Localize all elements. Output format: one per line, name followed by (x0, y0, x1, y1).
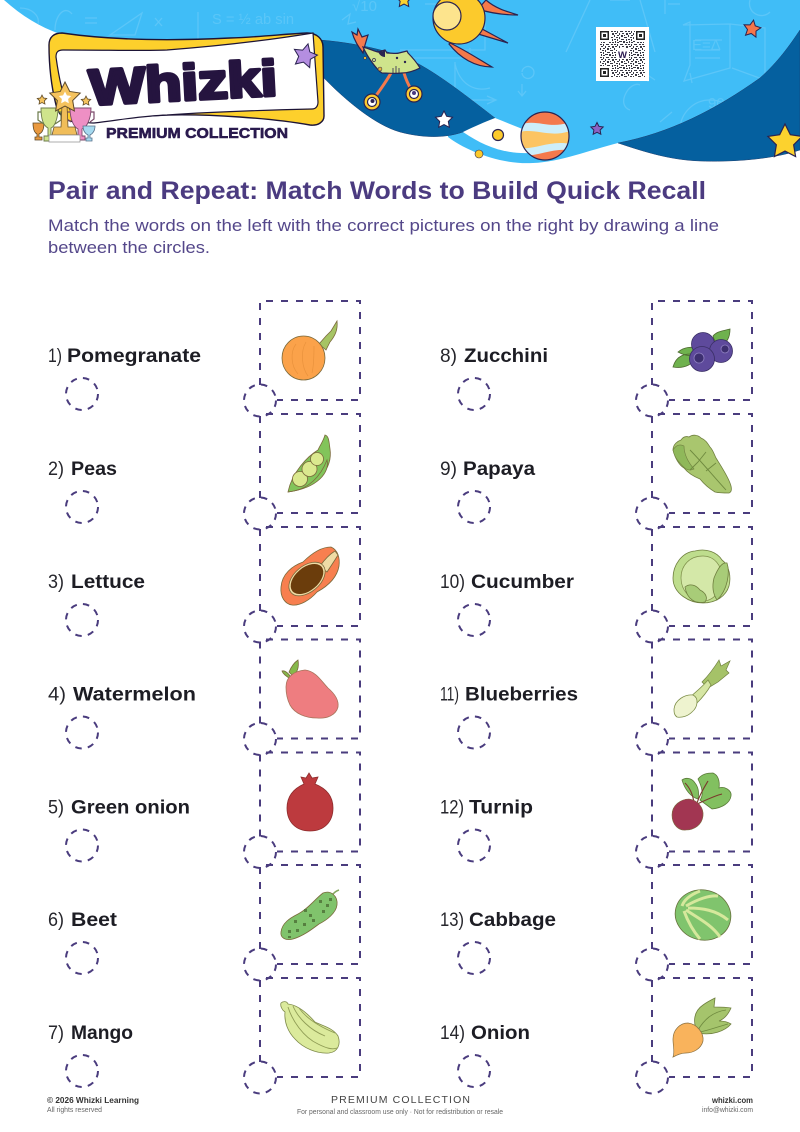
icon: beet (672, 773, 731, 830)
icon: cucumber (281, 890, 339, 940)
item 3: Lettuce with papaya picture (48, 527, 360, 642)
item 8: Zucchini with blueberries picture (440, 301, 752, 416)
icon: onion (282, 321, 337, 380)
label: 8) (440, 346, 457, 367)
label: Lettuce (71, 572, 145, 593)
item 13: Cabbage with watermelon picture (440, 865, 752, 980)
white wedge (463, 118, 530, 153)
item 9: Papaya with lettuce picture (440, 414, 752, 530)
label: 10) (440, 572, 465, 593)
title: Pair and Repeat: Match Words to Build Quick Recall (48, 177, 706, 205)
yellow badge (49, 33, 324, 125)
label: Papaya (463, 459, 535, 480)
label: 1) (48, 346, 62, 367)
item 6: Beet with cucumber picture (48, 865, 360, 980)
label: 7) (48, 1023, 64, 1044)
label (48, 459, 117, 480)
faint math doodles: E=Δ (692, 37, 721, 54)
tagline: PREMIUM COLLECTION (106, 125, 288, 142)
item 7: Mango with zucchini picture (48, 978, 360, 1094)
white plate (56, 33, 318, 123)
icon: papaya (281, 547, 339, 605)
item 12: Turnip with beet picture (440, 752, 752, 868)
label: 14) (440, 1023, 465, 1044)
faint math doodles (20, 0, 783, 160)
icon: green onion (674, 660, 730, 717)
label: 4) (48, 684, 66, 706)
label: Zucchini (464, 346, 548, 367)
footer right: info@whizki.com (702, 1107, 753, 1114)
label: Pomegranate (67, 346, 201, 367)
label (440, 798, 533, 818)
logo (33, 33, 324, 142)
faint math doodles: √2 (766, 99, 783, 116)
label: 11) (440, 684, 459, 706)
dark blue wave left (320, 40, 495, 137)
instructions: between the circles. (48, 238, 210, 257)
faint math doodles: 90 (708, 95, 725, 112)
footer left: © 2026 Whizki Learning (47, 1096, 139, 1105)
label: Beet (71, 910, 118, 931)
item 5: Green onion with pomegranate picture (48, 752, 360, 868)
label: Green onion (71, 798, 190, 818)
QR code: W (618, 50, 628, 60)
item 4: Watermelon with mango picture (48, 640, 360, 755)
footer center: PREMIUM COLLECTION (331, 1094, 470, 1106)
icon: mango (282, 660, 338, 718)
decorative stars and balls (396, 0, 800, 158)
sky blue wave (4, 0, 800, 163)
green alien creature (352, 29, 422, 110)
label: 6) (48, 910, 64, 931)
footer right (702, 1096, 753, 1114)
label: Blueberries (465, 684, 578, 706)
item 14: Onion with turnip picture (440, 978, 752, 1094)
purple star (291, 41, 320, 69)
label (440, 910, 556, 931)
label: Peas (71, 459, 117, 480)
trophies (33, 82, 95, 142)
label: 3) (48, 572, 64, 593)
label (48, 572, 145, 593)
item 10: Cucumber with cabbage picture (440, 527, 752, 642)
label (48, 910, 118, 931)
label: Cucumber (471, 572, 575, 593)
dark blue wave right (618, 30, 800, 161)
icon: pea pod (288, 435, 330, 492)
spikes (449, 0, 518, 67)
label: 2) (48, 459, 64, 480)
label (440, 459, 535, 480)
header banner background (4, 0, 800, 163)
footer center (297, 1094, 503, 1116)
rocket planet (433, 0, 518, 67)
label (440, 1023, 530, 1044)
icon: lettuce (673, 435, 731, 493)
icon: cabbage (673, 550, 730, 603)
label: Watermelon (73, 684, 196, 706)
icon: watermelon (669, 884, 737, 946)
footer left: All rights reserved (47, 1107, 102, 1114)
label: Onion (471, 1023, 530, 1044)
icon: pomegranate (287, 773, 333, 831)
item 2: Peas with peas picture (48, 414, 360, 530)
icon: turnip (673, 998, 731, 1057)
striped planet (520, 112, 570, 160)
instructions: Match the words on the left with the correct pictures on the right by drawing a line (48, 216, 719, 235)
label: Turnip (469, 798, 533, 818)
wordmark: Whizki (88, 50, 278, 116)
icon: zucchini (281, 1002, 339, 1053)
footer left (47, 1096, 139, 1114)
label: Cabbage (469, 910, 556, 931)
footer center: For personal and classroom use only · Not for redistribution or resale (297, 1109, 503, 1116)
label: 13) (440, 910, 464, 931)
label: 9) (440, 459, 457, 480)
label: 12) (440, 798, 464, 818)
instructions (48, 216, 719, 257)
icon: blueberries (673, 329, 732, 372)
faint math doodles: S = ½ ab sin (212, 11, 294, 28)
footer right: whizki.com (711, 1096, 753, 1105)
item 11: Blueberries with green onion picture (440, 640, 752, 755)
label: 5) (48, 798, 64, 818)
item 1: Pomegranate with onion picture (48, 301, 360, 416)
QR code (596, 27, 649, 81)
label: Mango (71, 1023, 133, 1044)
label (440, 572, 575, 593)
